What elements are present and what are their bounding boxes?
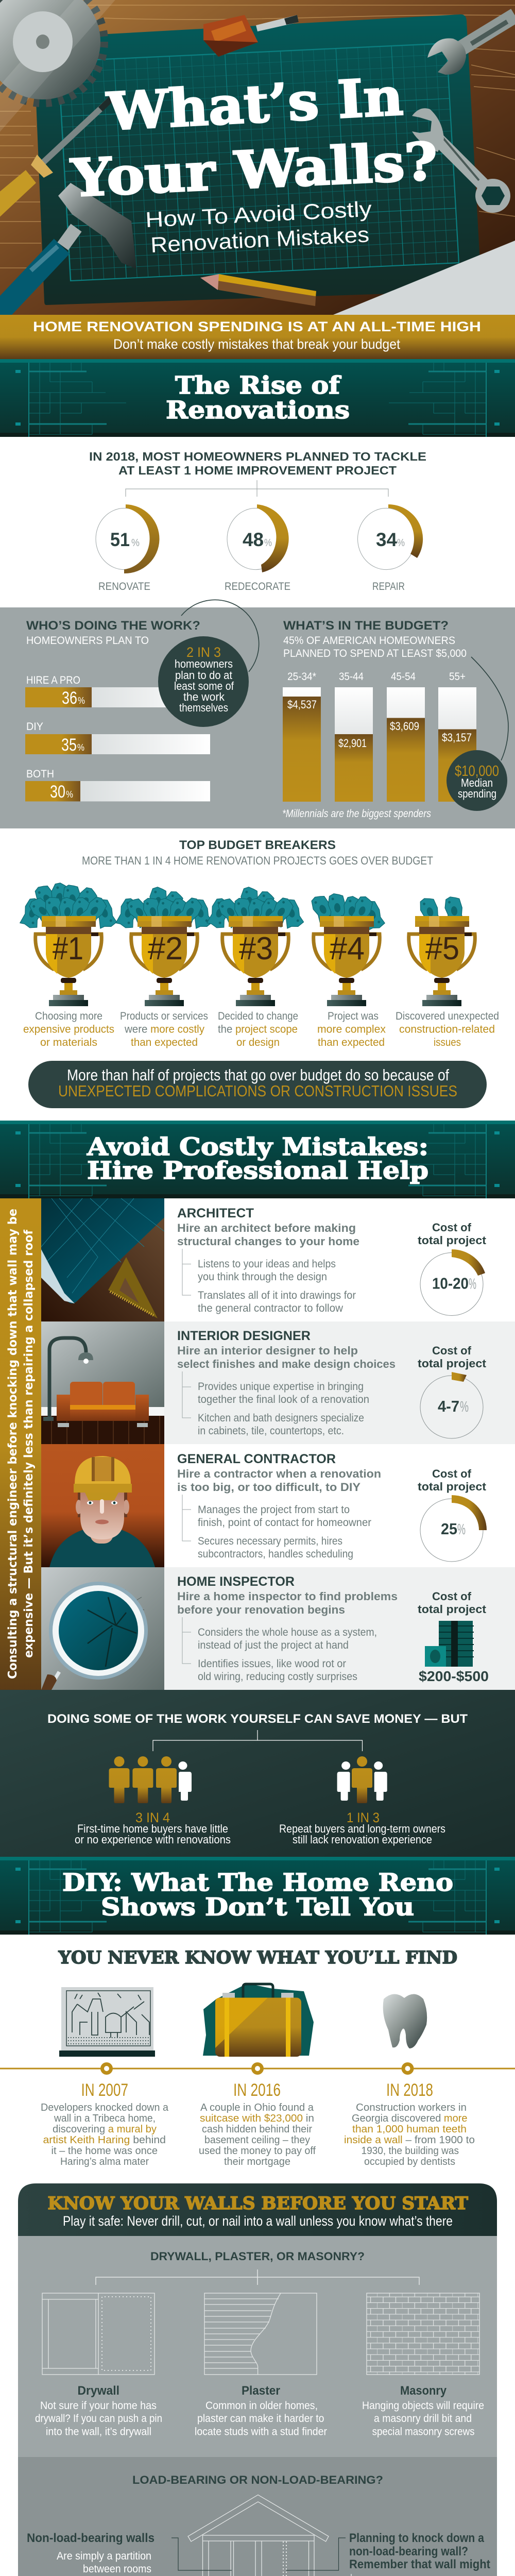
general contractor cost: 25 <box>441 1520 457 1538</box>
drywall card <box>35 2293 162 2438</box>
people: 1 in 3 <box>279 1756 445 1846</box>
gold banner: spending high: Don’t make costly mistakes that break your budget <box>113 336 400 352</box>
donut: redecorate 48%: 48 <box>243 529 264 550</box>
subtitle <box>145 197 372 257</box>
home inspector text: HOME INSPECTOR <box>177 1574 295 1589</box>
bar: diy <box>25 721 210 755</box>
people: 3 in 4 <box>75 1756 231 1846</box>
callout: 2 in 3 <box>158 636 249 727</box>
story: 2018 <box>344 2080 475 2167</box>
side strip: consulting an engineer: expensive — But it’s definitely less than repairing a collapsed roof <box>22 1229 36 1658</box>
plaster card: Common in older homes, <box>205 2400 318 2412</box>
story: 2007: it – the home was once <box>52 2145 158 2157</box>
interior designer text: Kitchen and bath designers specialize <box>198 1412 364 1424</box>
architect text: the general contractor to follow <box>198 1302 344 1314</box>
heading: who's doing the work: HOMEOWNERS PLAN TO <box>26 635 149 647</box>
home inspector text: Considers the whole house as a system, <box>198 1626 377 1638</box>
callout: non-load-bearing: Non-load-bearing walls <box>27 2531 154 2545</box>
heading: 2018 plans: IN 2018, MOST HOMEOWNERS PLANNED TO TACKLE <box>89 450 426 463</box>
callout: non-load-bearing: between rooms <box>83 2563 151 2575</box>
donut: repair 34% <box>357 504 423 592</box>
general contractor text <box>177 1452 381 1560</box>
trophy 5: #5 <box>425 931 459 967</box>
masonry card: special masonry screws <box>372 2426 475 2438</box>
bar: hire a pro: 36 <box>62 688 77 708</box>
masonry card: a masonry drill bit and <box>374 2413 472 2425</box>
people: 3 in 4: or no experience with renovations <box>75 1833 231 1846</box>
heading: top budget breakers <box>82 838 433 867</box>
people: 1 in 3: still lack renovation experience <box>293 1833 432 1846</box>
heading: top budget breakers: TOP BUDGET BREAKERS <box>179 838 336 852</box>
trophy 3: or design <box>236 1037 280 1048</box>
section header: the rise of renovations: The Rise of <box>175 371 341 400</box>
bar: hire a pro: % <box>78 696 85 706</box>
section header: diy what the shows don't tell <box>0 1857 515 1935</box>
callout: 2 in 3: homeowners <box>175 657 233 670</box>
trophy 1: Choosing more <box>35 1010 102 1022</box>
trophy 3: the project scope <box>218 1023 298 1036</box>
gold banner: spending high: HOME RENOVATION SPENDING IS AT AN ALL-TIME HIGH <box>33 319 481 334</box>
callout pill: unexpected complications <box>28 1061 487 1108</box>
illustration: blueprint <box>41 1198 164 1321</box>
home inspector cost: $200-$500 <box>419 1668 489 1684</box>
story: 2007: wall in a Tribeca home, <box>54 2113 156 2124</box>
section header: hire professional help: Avoid Costly Mistakes: <box>87 1133 428 1161</box>
donut: renovate 51%: 51 <box>110 529 130 550</box>
panel: save money but <box>0 1690 515 1857</box>
general contractor cost: Cost of <box>432 1467 472 1480</box>
callout: 2 in 3: plan to do at <box>175 669 232 682</box>
interior designer cost: 4-7 <box>438 1397 459 1415</box>
saw blade <box>0 0 129 149</box>
heading: wall types: DRYWALL, PLASTER, OR MASONRY? <box>150 2250 365 2263</box>
trophy 1 <box>20 882 117 1048</box>
diagram: house frame <box>20 2495 497 2576</box>
story: 2018: inside a wall – from 1900 to <box>344 2134 475 2146</box>
trophy 5 <box>396 895 499 1048</box>
callout: 2 in 3: least some of <box>174 680 234 692</box>
architect cost <box>418 1221 487 1316</box>
pencil <box>200 274 316 306</box>
illustration: contractor <box>41 1444 164 1567</box>
icon: money stacks <box>425 1621 474 1667</box>
story: 2007: IN 2007 <box>81 2080 128 2100</box>
trophy 1: expensive products <box>23 1023 114 1036</box>
heading: who's doing the work <box>26 619 200 647</box>
cutting mat <box>33 14 482 305</box>
donut: redecorate 48% <box>225 504 290 592</box>
story: 2016: basement ceiling – they <box>204 2134 310 2146</box>
story: 2007: Haring’s alma mater <box>60 2156 149 2167</box>
donut: renovate 51%: RENOVATE <box>98 581 150 592</box>
heading: know your walls <box>47 2193 468 2229</box>
architect text: Listens to your ideas and helps <box>198 1258 336 1270</box>
title: What’s In <box>105 66 404 142</box>
timeline marker 2018 <box>402 2062 414 2075</box>
general contractor text: GENERAL CONTRACTOR <box>177 1452 336 1466</box>
trophy 4 <box>309 892 386 1048</box>
bar: both: % <box>66 789 73 800</box>
mat grid <box>58 43 459 281</box>
architect text: Translates all of it into drawings for <box>198 1290 356 1301</box>
trophy 4: more complex <box>317 1023 386 1036</box>
callout: 2 in 3: 2 IN 3 <box>186 645 221 660</box>
heading: 2018 plans <box>89 450 426 477</box>
general contractor text: Secures necessary permits, hires <box>198 1535 342 1547</box>
home inspector text: Identifies issues, like wood rot or <box>198 1658 346 1670</box>
home inspector cost: total project <box>418 1603 487 1616</box>
story: 2016: A couple in Ohio found a <box>200 2102 314 2113</box>
trophy 5: issues <box>434 1037 461 1048</box>
interior designer text: Provides unique expertise in bringing <box>198 1381 364 1393</box>
heading: what's in the budget: 45% OF AMERICAN HOMEOWNERS <box>283 635 455 647</box>
story: 2016: their mortgage <box>224 2156 290 2167</box>
bar: diy: 35 <box>61 735 77 755</box>
trophy 1: #1 <box>53 931 83 967</box>
story: 2016: suitcase with $23,000 in <box>200 2113 314 2124</box>
heading: load bearing: LOAD-BEARING OR NON-LOAD-BEARING? <box>132 2473 383 2486</box>
callout pill: unexpected complications: UNEXPECTED COMPLICATIONS OR CONSTRUCTION ISSUES <box>58 1082 457 1100</box>
architect cost: Cost of <box>432 1221 472 1234</box>
home inspector text <box>177 1574 398 1683</box>
drywall card: drywall? If you can push a pin <box>35 2413 162 2425</box>
column: 25-34: $4,537 <box>287 698 317 711</box>
plaster card <box>195 2293 327 2438</box>
bar: diy: % <box>77 742 84 753</box>
section header: hire professional help: Hire Professional Help <box>87 1157 428 1185</box>
plaster card: Plaster <box>242 2384 280 2398</box>
callout: median spending: spending <box>458 787 496 800</box>
column: 35-44 <box>335 671 373 802</box>
home inspector text: old wiring, reducing costly surprises <box>198 1671 357 1683</box>
column: 45-54: 45-54 <box>391 671 416 683</box>
architect cost: 10-20 <box>432 1275 469 1292</box>
general contractor text: Manages the project from start to <box>198 1504 350 1516</box>
architect text: Hire an architect before making <box>177 1222 356 1234</box>
note: millennials: *Millennials are the biggest spenders <box>282 808 431 820</box>
interior designer cost <box>418 1344 487 1438</box>
hero: cutting mat and tools <box>0 0 515 315</box>
callout: non-load-bearing <box>27 2531 232 2575</box>
story: 2016: IN 2016 <box>233 2080 281 2100</box>
column: 25-34 <box>283 671 321 802</box>
section header: diy what the shows don't tell: DIY: What The Home Reno <box>62 1869 453 1897</box>
story: 2007: discovering a mural by <box>53 2124 157 2135</box>
architect cost: % <box>469 1276 476 1292</box>
timeline marker 2007 <box>100 2062 113 2075</box>
bar: both: 30 <box>50 782 65 802</box>
right wrench <box>412 108 510 213</box>
subtitle: How To Avoid Costly <box>145 197 372 232</box>
heading: you never know: YOU NEVER KNOW WHAT YOU’LL FIND <box>58 1947 457 1968</box>
callout: non-load-bearing: Are simply a partition <box>57 2550 151 2562</box>
home inspector cost: Cost of <box>432 1590 472 1603</box>
general contractor text: is too big, or too difficult, to DIY <box>177 1481 360 1494</box>
column: 25-34: 25-34* <box>287 671 316 683</box>
trophy 2: than expected <box>131 1037 198 1048</box>
donut: redecorate 48%: % <box>264 537 272 549</box>
trophy 3: Decided to change <box>218 1010 298 1022</box>
callout: median spending: $10,000 <box>455 763 499 779</box>
donut: renovate 51%: % <box>131 537 140 549</box>
bar: both: BOTH <box>26 768 54 780</box>
callout: planning to knock down: Remember that wall might <box>349 2557 490 2571</box>
general contractor text: subcontractors, handles scheduling <box>198 1548 353 1560</box>
story: 2018: occupied by dentists <box>364 2156 455 2167</box>
home inspector cost <box>418 1590 489 1684</box>
plaster card: locate studs with a stud finder <box>195 2426 327 2438</box>
story: 2018: IN 2018 <box>386 2080 433 2100</box>
story: 2018: Construction workers in <box>356 2102 467 2113</box>
general contractor cost <box>418 1467 487 1562</box>
paper corner <box>333 241 515 315</box>
architect text: structural changes to your home <box>177 1235 359 1248</box>
drywall card: into the wall, it’s drywall <box>46 2426 151 2438</box>
callout: median spending <box>447 750 507 811</box>
callout pill: unexpected complications: More than half of projects that go over budget do so because of <box>67 1066 449 1084</box>
architect text: you think through the design <box>198 1271 327 1283</box>
people: 1 in 3: Repeat buyers and long-term owners <box>279 1822 445 1835</box>
gold banner: spending high <box>0 315 515 359</box>
callout: 2 in 3: the work <box>183 690 225 703</box>
masonry card: Hanging objects will require <box>362 2400 484 2412</box>
column: 55+ <box>438 671 476 802</box>
column: 55+: 55+ <box>449 671 466 683</box>
illustration: sofa and lamp <box>41 1321 164 1444</box>
trophy 2: #2 <box>148 931 183 967</box>
trophy 5: Discovered unexpected <box>396 1010 499 1022</box>
callout: planning to knock down <box>286 2531 490 2576</box>
trophy 4: Project was <box>328 1010 379 1022</box>
general contractor text: finish, point of contact for homeowner <box>198 1517 371 1529</box>
section header: hire professional help <box>0 1121 515 1198</box>
architect text: ARCHITECT <box>177 1206 254 1221</box>
title: Your Walls? <box>69 131 439 209</box>
interior designer text: select finishes and make design choices <box>177 1358 396 1370</box>
panel: save money but: DOING SOME OF THE WORK YOURSELF CAN SAVE MONEY — BUT <box>47 1712 468 1726</box>
people: 3 in 4: 3 IN 4 <box>135 1810 170 1825</box>
bar: hire a pro: HIRE A PRO <box>26 674 80 686</box>
trophy 2: Products or services <box>120 1010 208 1022</box>
interior designer cost: total project <box>418 1357 487 1370</box>
column: 35-44: $2,901 <box>338 737 367 750</box>
interior designer text: in cabinets, tile, countertops, etc. <box>198 1425 344 1437</box>
column: 55+: $3,157 <box>442 731 472 744</box>
interior designer text: together the final look of a renovation <box>198 1394 369 1405</box>
donut: redecorate 48%: REDECORATE <box>225 581 290 592</box>
donut: repair 34%: REPAIR <box>372 581 405 592</box>
trophy 3: #3 <box>239 931 273 967</box>
panel: know your walls <box>18 2183 497 2576</box>
architect text <box>177 1206 359 1314</box>
callout: planning to knock down: non-load-bearing wall? <box>349 2545 468 2558</box>
general contractor cost: total project <box>418 1480 487 1493</box>
donut: repair 34%: % <box>397 537 405 549</box>
column: 45-54: $3,609 <box>390 720 419 733</box>
heading: who's doing the work: WHO’S DOING THE WORK? <box>26 619 200 633</box>
story: 2018: 1930, the building was <box>362 2145 459 2157</box>
interior designer text <box>177 1329 396 1437</box>
story: 2018: Georgia discovered more <box>352 2113 468 2124</box>
callout: 2 in 3: themselves <box>179 701 228 714</box>
column: 35-44: 35-44 <box>339 671 364 683</box>
side strip: consulting an engineer: Consulting a structural engineer before knocking down that wall may be <box>6 1209 20 1679</box>
donut: renovate 51% <box>96 504 160 592</box>
panel: who and budget <box>0 600 515 828</box>
column: 45-54 <box>387 671 425 802</box>
trophy 2 <box>115 886 213 1048</box>
heading: top budget breakers: MORE THAN 1 IN 4 HOME RENOVATION PROJECTS GOES OVER BUDGET <box>82 854 433 867</box>
callout: planning to knock down: Planning to knock down a <box>349 2531 485 2545</box>
home inspector text: Hire a home inspector to find problems <box>177 1590 398 1603</box>
people: 1 in 3: 1 IN 3 <box>347 1810 380 1825</box>
story: 2007 <box>41 2080 169 2167</box>
heading: know your walls: Play it safe: Never drill, cut, or nail into a wall unless you know what’s there <box>63 2213 453 2229</box>
trophy 1: or materials <box>40 1037 97 1048</box>
plaster card: plaster can make it harder to <box>197 2413 324 2425</box>
interior designer cost: % <box>460 1399 469 1415</box>
trophy 2: were more costly <box>124 1023 204 1036</box>
trophy 5: construction-related <box>399 1023 495 1036</box>
subtitle: Renovation Mistakes <box>150 222 370 257</box>
donut: repair 34%: 34 <box>376 529 397 550</box>
interior designer cost: Cost of <box>432 1344 472 1357</box>
section header: the rise of renovations: Renovations <box>166 396 350 425</box>
interior designer text: INTERIOR DESIGNER <box>177 1329 311 1343</box>
section header: the rise of renovations <box>0 359 515 437</box>
illustration: tooth <box>383 1994 427 2048</box>
masonry card <box>362 2293 484 2438</box>
trophy 3 <box>207 886 304 1048</box>
bar: hire a pro <box>25 674 210 708</box>
section header: diy what the shows don't tell: Shows Don’t Tell You <box>101 1893 414 1922</box>
row backgrounds <box>164 1321 515 1690</box>
heading: what's in the budget: WHAT’S IN THE BUDGET? <box>283 619 449 633</box>
people: 3 in 4: First-time home buyers have little <box>77 1822 228 1835</box>
home inspector text: before your renovation begins <box>177 1603 345 1616</box>
masonry card: Masonry <box>400 2384 447 2398</box>
trophy 4: than expected <box>318 1037 385 1048</box>
drywall card: Drywall <box>77 2384 119 2398</box>
bar: diy: DIY <box>26 721 43 733</box>
story: 2016: used the money to pay off <box>199 2145 316 2157</box>
trophy 4: #4 <box>330 931 365 967</box>
heading: what's in the budget: PLANNED TO SPEND AT LEAST $5,000 <box>283 648 467 659</box>
side strip: consulting an engineer <box>0 1198 41 1690</box>
story: 2016 <box>199 2080 316 2167</box>
heading: know your walls: KNOW YOUR WALLS BEFORE YOU START <box>47 2193 468 2214</box>
illustration: suitcase <box>203 1984 314 2057</box>
left screwdriver <box>0 96 114 222</box>
bar: both <box>25 768 210 802</box>
general contractor cost: % <box>457 1521 466 1538</box>
heading: 2018 plans: AT LEAST 1 HOME IMPROVEMENT PROJECT <box>118 464 397 477</box>
interior designer text: Hire an interior designer to help <box>177 1344 358 1357</box>
timeline marker 2016 <box>251 2062 264 2075</box>
illustration: magnifying glass <box>41 1567 164 1690</box>
hammer <box>0 183 136 314</box>
story: 2007: artist Keith Haring behind <box>43 2134 166 2146</box>
illustration: mural <box>59 1987 155 2057</box>
story: 2016: cash hidden behind their <box>202 2124 312 2135</box>
drywall card: Not sure if your home has <box>40 2400 157 2412</box>
top right wrench <box>427 15 515 75</box>
callout: median spending: Median <box>461 776 493 789</box>
title <box>69 66 439 209</box>
architect cost: total project <box>418 1234 487 1247</box>
story: 2018: than 1,000 human teeth <box>352 2124 467 2135</box>
home inspector text: instead of just the project at hand <box>198 1639 349 1651</box>
story: 2007: Developers knocked down a <box>41 2102 169 2113</box>
top screwdriver <box>203 15 299 57</box>
timeline line <box>0 2068 515 2069</box>
heading: what's in the budget <box>283 619 467 659</box>
general contractor text: Hire a contractor when a renovation <box>177 1467 381 1480</box>
